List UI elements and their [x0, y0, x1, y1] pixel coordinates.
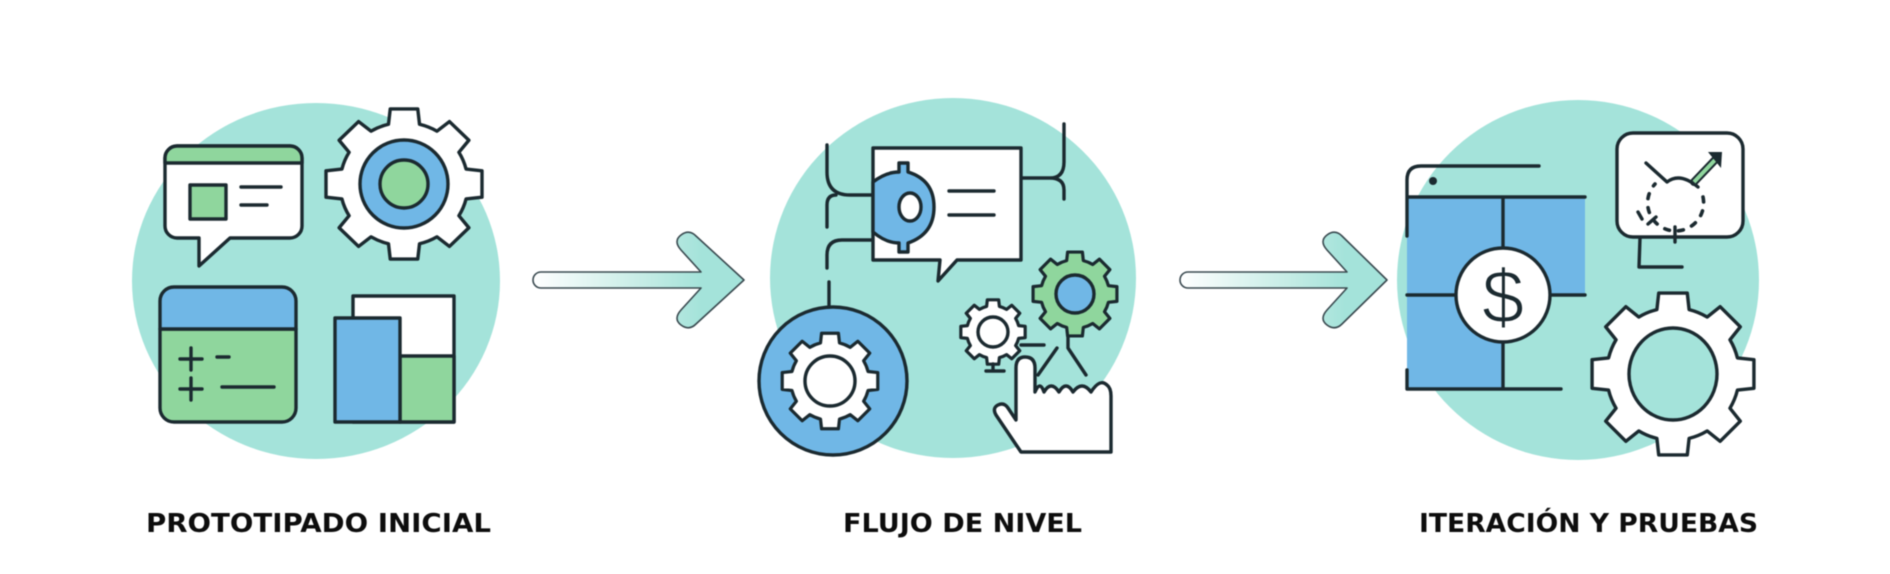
icon: browser grid with dollar: $: [1482, 255, 1524, 340]
icon: gear with blue ring: [326, 109, 482, 259]
icon: speech bubble window: [165, 146, 302, 266]
icon: pointing hand: [994, 357, 1111, 452]
arrow 1: [533, 232, 744, 328]
icon: blocks layout: [335, 296, 454, 422]
label: flujo de nivel: FLUJO DE NIVEL: [843, 509, 1082, 539]
background circle 3: [1397, 100, 1759, 460]
icon: monitor with chart: [1617, 133, 1743, 267]
label: iteración y pruebas: ITERACIÓN Y PRUEBAS: [1419, 507, 1758, 539]
panel: flujo de nivel: [759, 98, 1136, 458]
icon: calculator card: [160, 287, 296, 422]
background circle 1: [132, 103, 500, 459]
panel: prototipado inicial: [132, 103, 500, 459]
icon: speech bubble with blue gear: [873, 148, 1021, 281]
icon: large outline gear: [1592, 293, 1754, 455]
connector lines: [827, 124, 1064, 308]
icon: green gear: [1033, 252, 1117, 375]
label: prototipado inicial: PROTOTIPADO INICIAL: [146, 509, 491, 539]
arrow 2: [1180, 232, 1387, 328]
icon: browser grid with dollar: [1407, 166, 1585, 389]
background circle 2: [770, 98, 1136, 458]
icon: small white gear: [961, 300, 1044, 371]
panel: iteración y pruebas: [1397, 100, 1759, 460]
icon: blue circle with white gear: [759, 307, 907, 455]
